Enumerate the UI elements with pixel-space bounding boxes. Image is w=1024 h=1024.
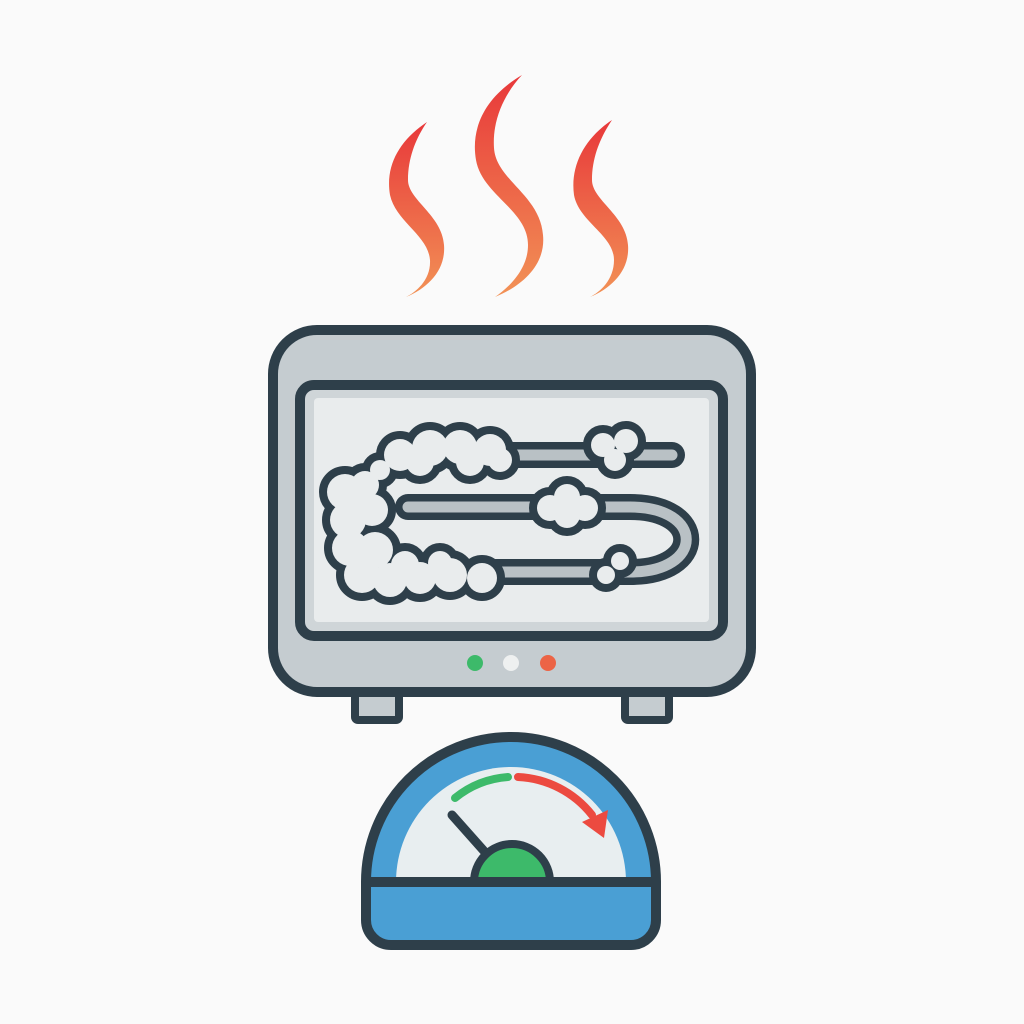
gauge bbox=[366, 737, 656, 945]
oven feet bbox=[355, 688, 669, 720]
smoke clouds bbox=[327, 429, 638, 597]
oven window bbox=[300, 385, 723, 636]
needle bbox=[452, 815, 492, 860]
heating tube bbox=[363, 455, 686, 572]
oven bbox=[273, 330, 751, 720]
gauge base bbox=[366, 882, 656, 945]
icon: right heat wave bbox=[573, 120, 628, 297]
icon: middle heat wave bbox=[475, 75, 543, 297]
red arc with arrow bbox=[518, 777, 608, 838]
green arc bbox=[455, 777, 508, 798]
icon: left heat wave bbox=[389, 122, 444, 297]
oven body bbox=[273, 330, 751, 692]
gauge dome bbox=[366, 737, 656, 882]
gauge face bbox=[396, 767, 626, 882]
heat waves bbox=[389, 75, 628, 297]
hub bbox=[474, 844, 550, 882]
indicator lights bbox=[467, 655, 556, 671]
